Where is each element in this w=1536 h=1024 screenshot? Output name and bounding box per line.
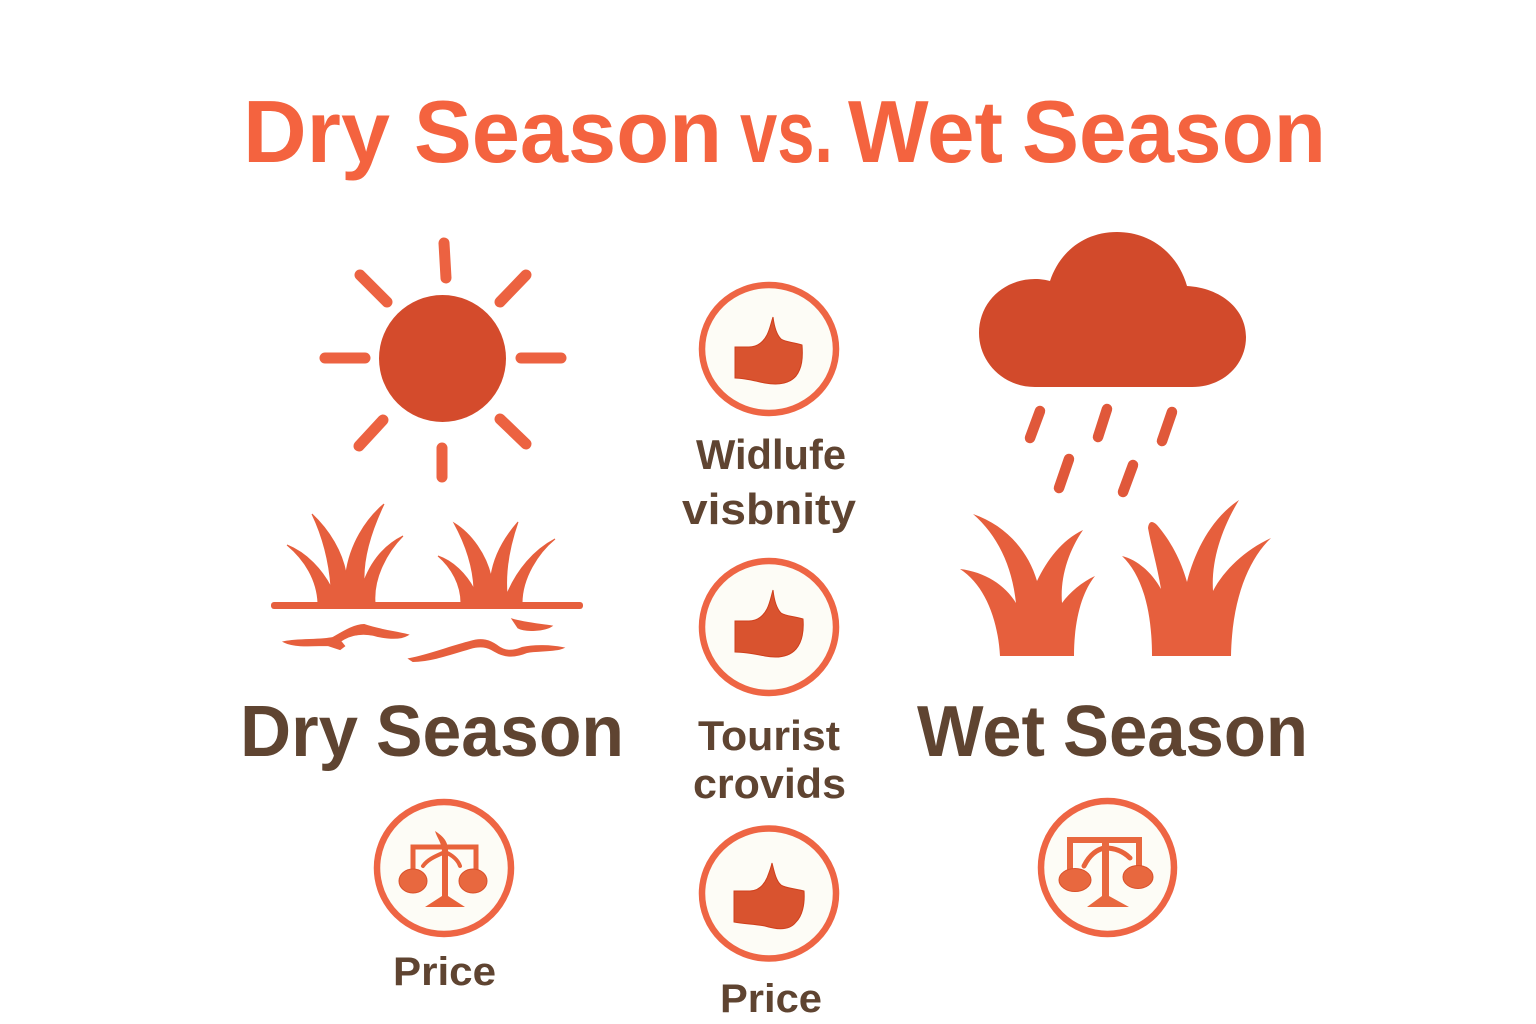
heading: wet season: Wet [917,692,1045,772]
label: tourist crowds: Tourist [698,712,840,759]
heading: wet season [917,692,1308,772]
icon: price scale, wet [1041,801,1174,934]
label: tourist crowds: crovids [693,760,846,807]
label: price: Price [720,977,822,1021]
heading: wet season: Season [1063,692,1308,772]
icon: lush grass [960,500,1271,656]
panel: wet season [917,232,1308,934]
label: wildlife visibility [682,431,857,534]
heading: dry season: Dry [240,692,358,772]
icon: dry grass and cracked ground [271,504,583,661]
title: Season [414,82,722,181]
icon: rain cloud [979,232,1246,492]
icon: price thumb [702,828,836,958]
heading: dry season [240,692,624,772]
title: Season [1022,82,1326,181]
title [243,82,1326,181]
title: vs. [740,82,833,181]
label: wildlife visibility: Widlufe [696,431,846,478]
title: Dry [243,82,390,181]
label: price: Price [393,950,496,994]
icon: wildlife visibility thumb [702,285,836,413]
icon: tourist crowds thumb [702,561,836,693]
icon: price scale, dry [377,802,511,934]
panel: comparison column [682,285,857,1021]
icon: sun [325,243,561,477]
label: tourist crowds [693,712,846,807]
panel: dry season [240,243,624,994]
heading: dry season: Season [376,692,624,772]
label: wildlife visibility: visbnity [682,485,857,534]
title: Wet [848,82,1003,181]
